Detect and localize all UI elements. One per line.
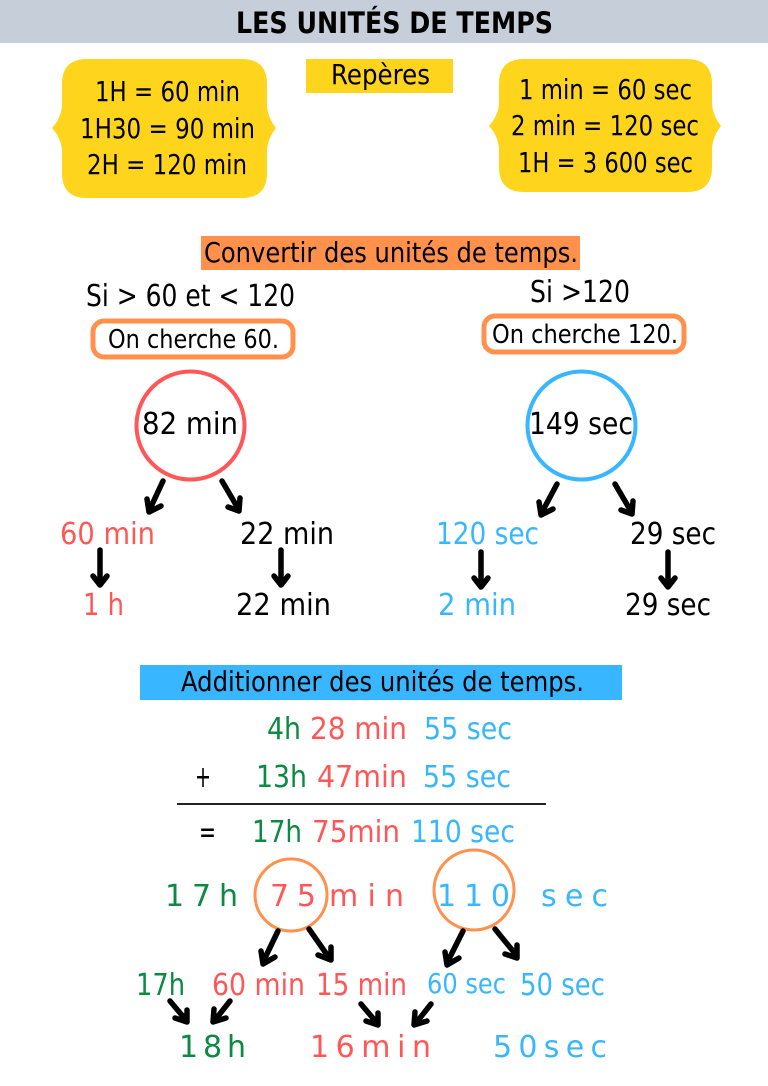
result: 2 min: 2 min	[438, 588, 516, 623]
arrow: to 22 min result	[274, 550, 288, 585]
result: 1 h: 1 h	[83, 588, 124, 623]
arrow: 17h to 18 h	[170, 1001, 187, 1022]
spaced sum with circled values	[165, 850, 608, 931]
final result: 1 8 h	[179, 1030, 246, 1065]
panel: hour benchmarks: 1H = 60 min	[95, 75, 240, 108]
breakdown row: 60 sec	[427, 967, 506, 1000]
addition: first operand: 55 sec	[424, 712, 512, 747]
label: 29 sec: 29 sec	[630, 517, 716, 552]
circle: 82 min	[136, 372, 244, 480]
addition: raw sum: 110 sec	[411, 815, 515, 850]
addition: second operand: 13h	[256, 760, 307, 795]
arrow: 75 to 60 min	[261, 931, 278, 964]
addition: raw sum	[199, 815, 515, 850]
final result	[179, 1030, 607, 1065]
label: 22 min: 22 min	[240, 517, 334, 552]
spaced sum with circled values: m i n	[329, 879, 404, 914]
condition: between 60 and 120: Si > 60 et < 120	[86, 279, 295, 314]
heading: convert time units: Convertir des unités de temps.	[204, 236, 578, 269]
heading: add time units: Additionner des unités de temps.	[181, 665, 584, 698]
breakdown row: 15 min	[316, 968, 407, 1003]
arrow: to 2 min	[474, 552, 488, 587]
arrow: 60 sec to 16 min	[414, 1004, 431, 1025]
addition: second operand: +	[195, 760, 211, 795]
arrow: to 29 sec	[615, 484, 633, 514]
arrow: 110 to 60 sec	[445, 931, 463, 965]
final result: 5 0 s e c	[493, 1030, 607, 1065]
arrow: 15 min to 16 min	[361, 1004, 378, 1025]
arrow: to 29 sec result	[661, 552, 675, 587]
circle: 110	[434, 850, 514, 930]
heading: benchmarks: Repères	[331, 58, 430, 91]
addition: raw sum: 75min	[312, 815, 400, 850]
panel: minute benchmarks: 2 min = 120 sec	[511, 109, 699, 142]
addition rule	[177, 803, 546, 805]
panel: hour benchmarks	[52, 59, 276, 198]
result: 29 sec: 29 sec	[625, 588, 711, 623]
arrow: 60 min to 18 h	[213, 1001, 230, 1022]
spaced sum with circled values: 7 5	[270, 879, 316, 914]
addition: first operand	[267, 712, 512, 747]
arrow: to 60 min	[147, 481, 163, 512]
spaced sum with circled values: 1 1 0	[437, 879, 510, 914]
addition: second operand	[195, 760, 511, 795]
callout: look for 60: On cherche 60.	[108, 325, 279, 355]
addition: second operand: 47min	[317, 760, 407, 795]
panel: minute benchmarks	[489, 59, 721, 192]
label: 120 sec: 120 sec	[436, 517, 539, 552]
circle: 149 sec: 149 sec	[529, 407, 633, 442]
addition: raw sum: 17h	[252, 815, 302, 850]
breakdown row: 60 min	[212, 968, 305, 1003]
panel: minute benchmarks: 1H = 3 600 sec	[518, 146, 693, 179]
arrow: 75 to 15 min	[309, 929, 331, 960]
spaced sum with circled values: 1 7 h	[165, 879, 238, 914]
panel: hour benchmarks: 1H30 = 90 min	[80, 112, 255, 145]
result: 22 min: 22 min	[236, 588, 331, 623]
title banner	[0, 0, 768, 43]
diagram: converting 82 min	[60, 372, 334, 623]
title banner: LES UNITÉS DE TEMPS	[236, 6, 553, 40]
final result: 1 6 m i n	[310, 1030, 431, 1065]
addition: second operand: 55 sec	[423, 760, 511, 795]
addition: raw sum: =	[199, 815, 216, 850]
addition: first operand: 4h	[267, 712, 301, 747]
panel: hour benchmarks: 2H = 120 min	[87, 148, 247, 181]
arrow: 110 to 50 sec	[495, 929, 517, 958]
breakdown row: 17h	[136, 968, 185, 1003]
breakdown row: 50 sec	[520, 968, 605, 1003]
arrow: to 22 min	[222, 481, 240, 511]
addition: first operand: 28 min	[310, 712, 407, 747]
arrow: to 120 sec	[539, 484, 557, 515]
callout: look for 120: On cherche 120.	[492, 320, 678, 350]
label: 60 min: 60 min	[60, 517, 155, 552]
arrow: to 1 h	[93, 550, 107, 585]
circle: 82 min: 82 min	[142, 407, 238, 442]
diagram: converting 149 sec	[436, 372, 716, 623]
circle: 149 sec	[528, 372, 636, 480]
condition: above 120: Si >120	[530, 275, 630, 310]
circle: 75	[255, 859, 327, 931]
panel: minute benchmarks: 1 min = 60 sec	[519, 73, 692, 106]
spaced sum with circled values: s e c	[541, 879, 608, 914]
breakdown row	[136, 967, 605, 1003]
